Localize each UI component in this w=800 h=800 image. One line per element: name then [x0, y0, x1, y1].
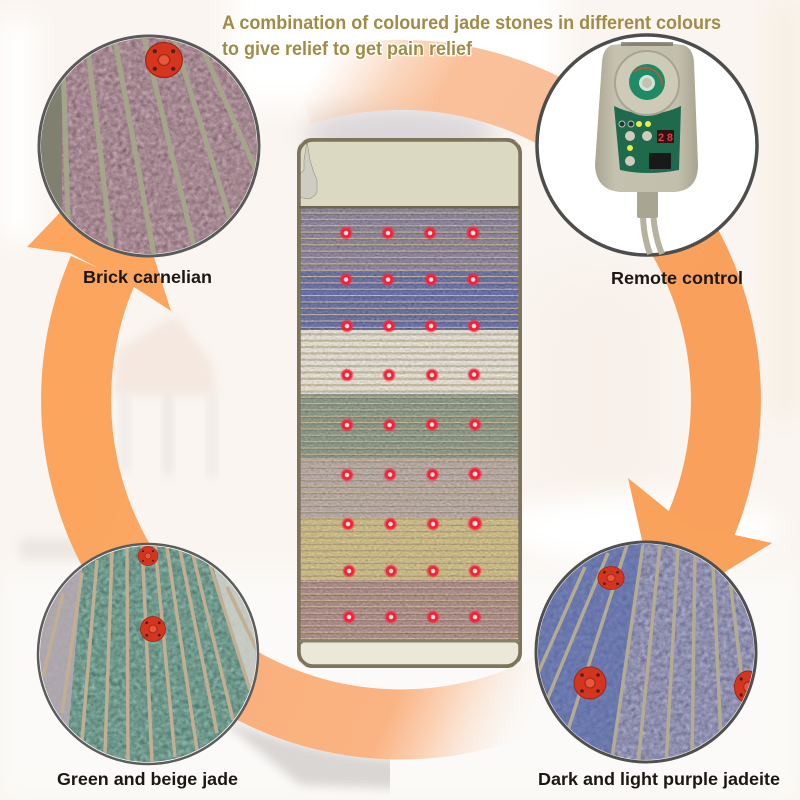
red buttons — [574, 566, 762, 703]
remote: dial — [615, 51, 679, 115]
remote: power switch — [649, 153, 671, 169]
mat: jade stone bands — [300, 208, 519, 641]
circular arrow: top right arc — [300, 75, 772, 620]
remote: control panel — [614, 106, 681, 173]
circle: brick carnelian close-up — [39, 30, 259, 260]
label: remote control: Remote control — [611, 268, 743, 288]
remote: buttons — [625, 131, 652, 166]
jade mat product — [297, 138, 522, 668]
red buttons — [138, 546, 165, 641]
circle: dark and light purple jadeite close-up — [535, 542, 762, 765]
red button — [146, 42, 182, 78]
mat: controller plug — [300, 143, 318, 199]
remote: body — [595, 42, 698, 192]
remote: cables — [643, 205, 662, 254]
circular arrow: bottom left arc — [27, 150, 560, 725]
circle: remote control — [537, 35, 757, 255]
remote: vent — [621, 42, 673, 46]
title text: A combination of coloured jade stones in different colours — [222, 13, 721, 34]
label: dark and light purple jadeite: Dark and light purple jadeite — [538, 769, 780, 789]
title text: to give relief to get pain relief — [222, 39, 473, 60]
mat: red LED lights — [339, 226, 483, 624]
mat: plain top section — [300, 141, 519, 207]
remote: strain relief — [637, 190, 658, 218]
label: green and beige jade: Green and beige jade — [57, 769, 238, 789]
mat: plain bottom section — [300, 642, 519, 666]
title text — [222, 13, 721, 60]
circle: green and beige jade close-up — [36, 540, 262, 770]
remote: indicator lights — [619, 121, 651, 151]
remote: temperature display: 28 — [658, 132, 673, 144]
label: brick carnelian: Brick carnelian — [83, 267, 212, 287]
